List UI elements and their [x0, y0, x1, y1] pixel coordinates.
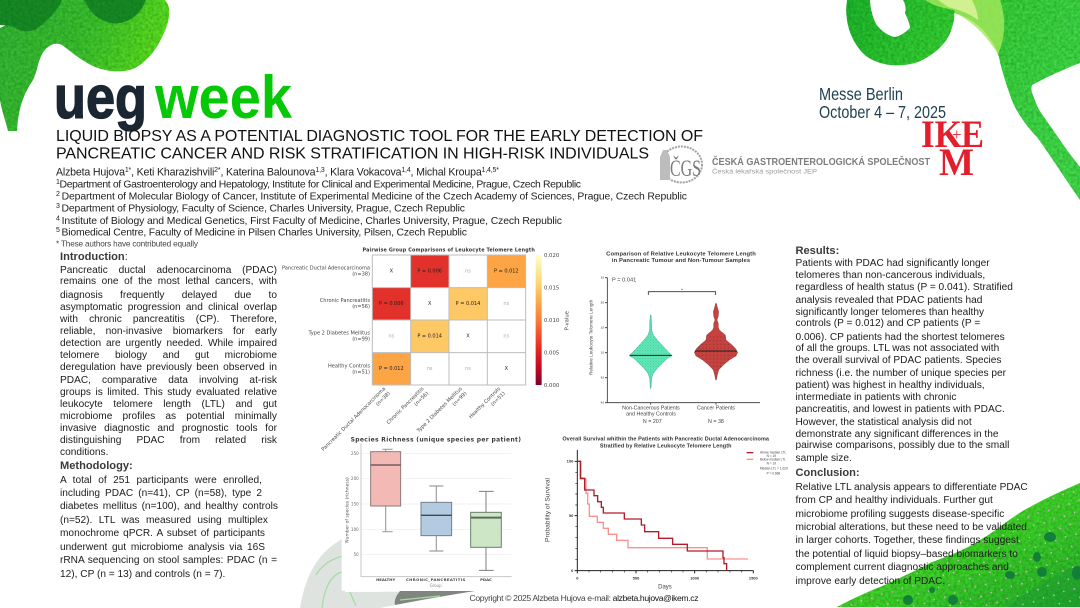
chart: pairwise heatmap — [282, 247, 571, 453]
chart: overall survival Kaplan-Meier: 1000 — [690, 575, 700, 580]
chart: species richness box plot: Group — [430, 583, 442, 588]
chart: pairwise heatmap: Pairwise Group Comparisons of Leukocyte Telomere Length — [362, 247, 535, 253]
chart: pairwise heatmap: 0.020 — [544, 253, 560, 259]
chart: species richness box plot: 250 — [351, 451, 359, 456]
chart: pairwise heatmap: Healthy Controls — [328, 363, 370, 369]
affiliations: 3 — [56, 203, 62, 210]
affiliations: 1 — [56, 179, 60, 186]
chart: pairwise heatmap: ns — [427, 366, 433, 372]
authors: , Katerina Balounova — [220, 166, 316, 178]
text block: results — [796, 245, 1013, 464]
logo: Czech Gastroenterological Society seal: ČGS — [670, 155, 701, 181]
text block: methodology: including PDAC (n=41), CP (n=58), type 2 — [60, 488, 262, 499]
chart: telomere length violin plot: Non-Cancerous Patients — [622, 406, 680, 412]
text block: introduction: PDAC, comparative data involving at-risk — [60, 375, 277, 386]
chart: pairwise heatmap: P = 0.006 — [379, 301, 404, 307]
logo: ueg week — [54, 64, 293, 131]
chart: telomere length violin plot: 1.0 — [601, 353, 605, 355]
chart: pairwise heatmap: Healthy Controls — [468, 386, 502, 420]
society name: ČESKÁ GASTROENTEROLOGICKÁ SPOLEČNOST — [712, 156, 930, 168]
chart: species richness box plot: 100 — [351, 527, 359, 532]
affiliations: Biomedical Centre, Faculty of Medicine in Pilsen Charles University, Pilsen, Czech Republic — [61, 228, 467, 238]
chart: pairwise heatmap: 0.010 — [544, 318, 560, 324]
chart: telomere length violin plot: 1.5 — [601, 328, 605, 330]
text block: introduction: with chronic pancreatitis (CP). Therefore, — [60, 314, 277, 325]
text block: methodology: A total of 251 participants were enrolled, — [60, 475, 262, 486]
text block: methodology: diabetes mellitus (n=100), and healthy controls — [60, 501, 278, 512]
event venue and date: October 4 – 7, 2025 — [819, 102, 946, 122]
chart: pairwise heatmap: (n=51) — [490, 391, 507, 408]
chart: overall survival Kaplan-Meier: Days — [658, 585, 672, 591]
chart: species richness box plot: HEALTHY — [376, 577, 395, 582]
decoration: bottom-left pale globe — [300, 537, 475, 608]
chart: pairwise heatmap: (n=56) — [413, 391, 430, 408]
text block: methodology: 12), CP (n = 13) and controls (n = 7). — [60, 569, 225, 580]
text block: introduction: Pancreatic ductal adenocarcinoma (PDAC) — [60, 265, 277, 276]
text block: conclusion: microbiome profiling suggests disease-specific — [796, 509, 1004, 520]
chart: pairwise heatmap: (n=38) — [352, 271, 370, 277]
text block: conclusion: improve early detection of PDAC. — [796, 576, 945, 587]
authors: 1* — [125, 167, 132, 174]
text block: introduction: microbiome profiles as potential minimally — [60, 411, 277, 422]
legend: Below median LTL — [760, 458, 786, 462]
chart: telomere length violin plot: 2.0 — [601, 303, 605, 305]
text block: methodology: monochrome qPCR. A subset of participants — [60, 528, 265, 539]
chart: telomere length violin plot: * — [681, 287, 683, 293]
authors: 1,4 — [401, 167, 411, 174]
chart: telomere length violin plot: P = 0.041 — [612, 278, 636, 284]
text block: introduction: leukocyte telomere length (LTL) and gut — [60, 399, 277, 410]
authors: , Keti Kharazishvili — [131, 166, 214, 178]
text block: methodology: (n=52). LTL was measured using multiplex — [60, 515, 268, 526]
chart: species richness box plot: 200 — [351, 476, 359, 481]
text block: results: patient) was highest in healthy individuals, — [796, 380, 985, 391]
logo: IKEM: M — [939, 141, 974, 184]
logo: IKEM: E — [961, 113, 984, 156]
chart: pairwise heatmap: 0.015 — [544, 285, 559, 291]
text block: introduction: distinguishing PDAC from related risk — [60, 435, 277, 446]
chart: overall survival Kaplan-Meier: 0 — [576, 575, 579, 580]
authors: , Klara Vokacova — [325, 166, 402, 178]
logo: Czech Gastroenterological Society seal — [660, 146, 702, 182]
text block: results: analysis revealed that PDAC patients had — [796, 295, 982, 306]
chart: pairwise heatmap: ns — [388, 333, 395, 339]
chart: telomere length violin plot: and Healthy Controls — [626, 411, 676, 417]
title: PANCREATIC CANCER AND RISK STRATIFICATION IN HIGH-RISK INDIVIDUALS — [56, 145, 649, 162]
affiliations: Department of Molecular Biology of Cancer, Institute of Experimental Medicine of the Czech Academy of Sciences, Prague, Czech Republic — [62, 192, 687, 202]
chart: overall survival Kaplan-Meier: 100 — [567, 459, 574, 464]
text block: introduction: reliable, non-invasive biomarkers for early — [60, 326, 277, 337]
text block: conclusion: in larger cohorts. Together, these findings suggest — [796, 535, 1019, 546]
text block: introduction: Introduction: — [60, 251, 128, 263]
chart: pairwise heatmap: ns — [503, 301, 510, 307]
chart: species richness box plot: Number of species (richness) — [345, 477, 351, 543]
chart: pairwise heatmap: 0.005 — [544, 350, 559, 356]
chart: pairwise heatmap: (n=99) — [352, 337, 370, 343]
chart: pairwise heatmap: P-value — [565, 311, 571, 330]
chart: pairwise heatmap: (n=51) — [352, 369, 370, 375]
chart: species richness box plot: 150 — [351, 502, 359, 507]
text block: results: sample size. — [796, 453, 852, 464]
legend: P = 0.668 — [767, 471, 780, 475]
chart: species richness box plot — [342, 433, 521, 591]
chart: pairwise heatmap: (n=99) — [452, 391, 468, 408]
chart: overall survival Kaplan-Meier: Stratified by Relative Leukocyte Telomere Length — [600, 443, 732, 449]
decoration: bottom-right green organism — [837, 483, 1080, 607]
text block: introduction: remains one of the most lethal cancers, with — [60, 276, 277, 287]
legend: Above median LTL — [760, 450, 786, 454]
event venue and date: Messe Berlin — [819, 84, 903, 104]
chart: telomere length violin plot: Comparison of Relative Leukocyte Telomere Length — [606, 251, 756, 257]
affiliations: Department of Gastroenterology and Hepatology, Institute for Clinical and Experimental Medicine, Prague, Czech Republic — [60, 180, 581, 190]
chart: pairwise heatmap: X — [466, 333, 470, 339]
chart: species richness box plot: CHRONIC_PANCREATITIS — [406, 577, 466, 582]
text block: introduction: deregulation have previously been observed in — [60, 362, 277, 373]
chart: telomere length violin plot: N = 38 — [708, 419, 724, 425]
text block: results: controls (P = 0.012) and CP patients (P = — [796, 318, 980, 329]
affiliations: Institute of Biology and Medical Genetics, First Faculty of Medicine, Charles University, Prague, Czech Republic — [62, 216, 562, 227]
authors: 2* — [214, 167, 221, 174]
legend: N = 19 — [767, 461, 776, 465]
text block: methodology: rRNA sequencing on stool samples: PDAC (n = — [60, 555, 277, 566]
chart: telomere length violin plot: in Pancreatic Tumour and Non-Tumour Samples — [612, 258, 750, 264]
chart: pairwise heatmap: Pancreatic Ductal Adenocarcinoma — [321, 386, 387, 453]
chart: pairwise heatmap: X — [390, 268, 394, 274]
affiliations: 5 — [56, 227, 62, 234]
chart: pairwise heatmap: 0.000 — [544, 383, 560, 389]
text block: introduction — [60, 251, 277, 458]
text block: introduction: detection are urgently needed. While impaired — [60, 338, 277, 349]
title: LIQUID BIOPSY AS A POTENTIAL DIAGNOSTIC TOOL FOR THE EARLY DETECTION OF — [56, 128, 703, 145]
chart: pairwise heatmap: Chronic Pancreatitis — [320, 298, 370, 304]
chart: pairwise heatmap: P = 0.012 — [379, 366, 404, 372]
chart: pairwise heatmap: X — [428, 301, 432, 307]
affiliations: Department of Physiology, Faculty of Science, Charles University, Prague, Czech Republic — [62, 203, 465, 214]
text block: results: the overall survival of PDAC patients. Species — [796, 355, 1001, 366]
chart: overall survival Kaplan-Meier: 500 — [633, 575, 640, 580]
chart: overall survival Kaplan-Meier: 1500 — [749, 575, 759, 580]
chart: pairwise heatmap: (n=38) — [375, 391, 392, 408]
text block: introduction: conditions. — [60, 447, 108, 458]
chart: telomere length violin plot: Relative Leukocyte Telomere Length — [589, 299, 594, 375]
chart: pairwise heatmap: X — [505, 366, 509, 372]
text block: introduction: asymptomatic progression and clinical overlap — [60, 302, 277, 313]
logo: IKEM: IK — [921, 113, 963, 156]
authors: 1,3 — [315, 167, 325, 174]
chart: overall survival Kaplan-Meier — [544, 437, 788, 591]
text block: results: Results: — [796, 245, 839, 257]
text block: introduction: diagnosis frequently delayed due to — [60, 290, 277, 301]
text block: results: telomeres than non-cancerous individuals, — [796, 270, 985, 281]
text block: introduction: telomere biology and gut microbiome — [60, 350, 277, 361]
chart: telomere length violin plot: Cancer Patients — [697, 406, 735, 412]
chart: telomere length violin plot: 2.5 — [601, 278, 605, 280]
affiliations: * These authors have contributed equally — [56, 240, 199, 248]
society name: Česká lékařská společnost JEP — [712, 166, 818, 176]
box: chronic pancreatitis — [421, 486, 452, 551]
text block: conclusion: the potential of liquid biopsy–based biomarkers to — [796, 549, 1018, 560]
decoration: top-right green organism — [846, 0, 1080, 200]
text block: results: Patients with PDAC had significantly longer — [796, 258, 990, 269]
text block: results: pancreatitis, and lowest in patients with PDAC. — [796, 404, 1005, 415]
text block: results: pairwise comparisons, possibly due to the small — [796, 440, 1009, 451]
affiliations: 2 — [56, 191, 62, 198]
chart: pairwise heatmap: P = 0.014 — [456, 301, 480, 307]
chart: pairwise heatmap: Type 2 Diabetes Mellitus — [415, 386, 464, 435]
chart: overall survival Kaplan-Meier: Probability of Survival — [544, 477, 551, 542]
text block: conclusion — [796, 467, 1028, 587]
chart: species richness box plot: Species Richness (unique species per patient) — [351, 436, 521, 443]
chart: pairwise heatmap: (n=56) — [352, 304, 370, 310]
authors: 1,4,5* — [482, 167, 499, 174]
chart: pairwise heatmap: P = 0.012 — [494, 268, 519, 274]
affiliations — [56, 179, 687, 248]
text block: conclusion: complement current diagnostic approaches and — [796, 562, 1009, 573]
chart: species richness box plot: 50 — [354, 552, 359, 557]
text block: results: 0.006). CP patients had the shortest telomeres — [796, 332, 1005, 343]
text block: methodology — [60, 460, 278, 580]
chart: pairwise heatmap: Chronic Pancreatitis — [386, 386, 426, 426]
text block: methodology: underwent gut microbiome analysis via 16S — [60, 542, 265, 553]
box: healthy — [371, 449, 401, 532]
box: PDAC — [471, 491, 501, 570]
text block: methodology: Methodology: — [60, 460, 133, 472]
affiliations: 4 — [56, 216, 62, 222]
title — [56, 128, 703, 162]
logo: ueg week: ueg — [54, 64, 147, 131]
event venue and date — [819, 84, 946, 122]
chart: pairwise heatmap: ns — [503, 333, 510, 339]
legend: N = 19 — [767, 454, 776, 458]
text block: results: demonstrate any significant differences in the — [796, 429, 998, 440]
text block: conclusion: Conclusion: — [796, 467, 860, 479]
logo: ueg week: week — [154, 64, 293, 131]
logo: IKEM: + — [952, 125, 962, 144]
text block: results: regardless of health status (P = 0.041). Stratified — [796, 282, 1013, 293]
text block: results: However, the statistical analysis did not — [796, 417, 972, 428]
chart: pairwise heatmap: ns — [465, 366, 471, 372]
text block: introduction: groups is limited. This study evaluated relative — [60, 387, 277, 398]
text block: introduction: invasive diagnostic and prognostic tools for — [60, 423, 277, 434]
curve: above median — [577, 461, 727, 571]
chart: pairwise heatmap: P = 0.014 — [417, 333, 442, 339]
chart: telomere length violin plot: 0.5 — [601, 378, 605, 380]
text block: results: intermediate in patients with chronic — [796, 392, 956, 403]
text block: conclusion: Relative LTL analysis appears to differentiate PDAC — [796, 482, 1028, 493]
chart: pairwise heatmap: Pancreatic Ductal Adenocarcinoma — [282, 265, 370, 271]
society name — [712, 156, 930, 176]
chart: telomere length violin plot: 0.0 — [601, 403, 605, 405]
text block: conclusion: microbial alterations, but these need to be validated — [796, 522, 1027, 533]
chart: pairwise heatmap: P = 0.006 — [417, 268, 442, 274]
chart: species richness box plot: PDAC — [480, 577, 492, 582]
legend — [747, 450, 788, 475]
legend: Median LTL = 1.029 — [760, 466, 788, 470]
curve: below median — [577, 461, 748, 559]
chart: pairwise heatmap: ns — [465, 268, 471, 274]
text block: results: of all the groups. LTL was not associated with — [796, 343, 999, 354]
authors: , Michal Kroupa — [411, 166, 482, 178]
chart: overall survival Kaplan-Meier: 0 — [571, 568, 574, 573]
decoration: top-left green organism — [0, 0, 169, 131]
chart: telomere length violin plot: N = 207 — [643, 419, 662, 425]
chart: overall survival Kaplan-Meier: Overall Survival whithin the Patients with Pancreatic Ductal Adenocarcinoma — [562, 437, 770, 443]
text block: conclusion: from CP and healthy individuals. Further gut — [796, 495, 993, 506]
copyright: Copyright © 2025 Alzbeta Hujova e-mail: alzbeta.hujova@ikem.cz — [470, 593, 698, 603]
text block: results: significantly longer telomeres than healthy — [796, 307, 984, 318]
text block: results: richness (i.e. the number of unique species per — [796, 368, 1006, 379]
logo: IKEM — [921, 113, 984, 184]
chart: telomere length violin plot — [589, 251, 760, 425]
chart: pairwise heatmap: Type 2 Diabetes Mellitus — [307, 331, 370, 337]
chart: overall survival Kaplan-Meier: 50 — [569, 513, 574, 518]
authors: Alzbeta Hujova — [56, 166, 125, 178]
